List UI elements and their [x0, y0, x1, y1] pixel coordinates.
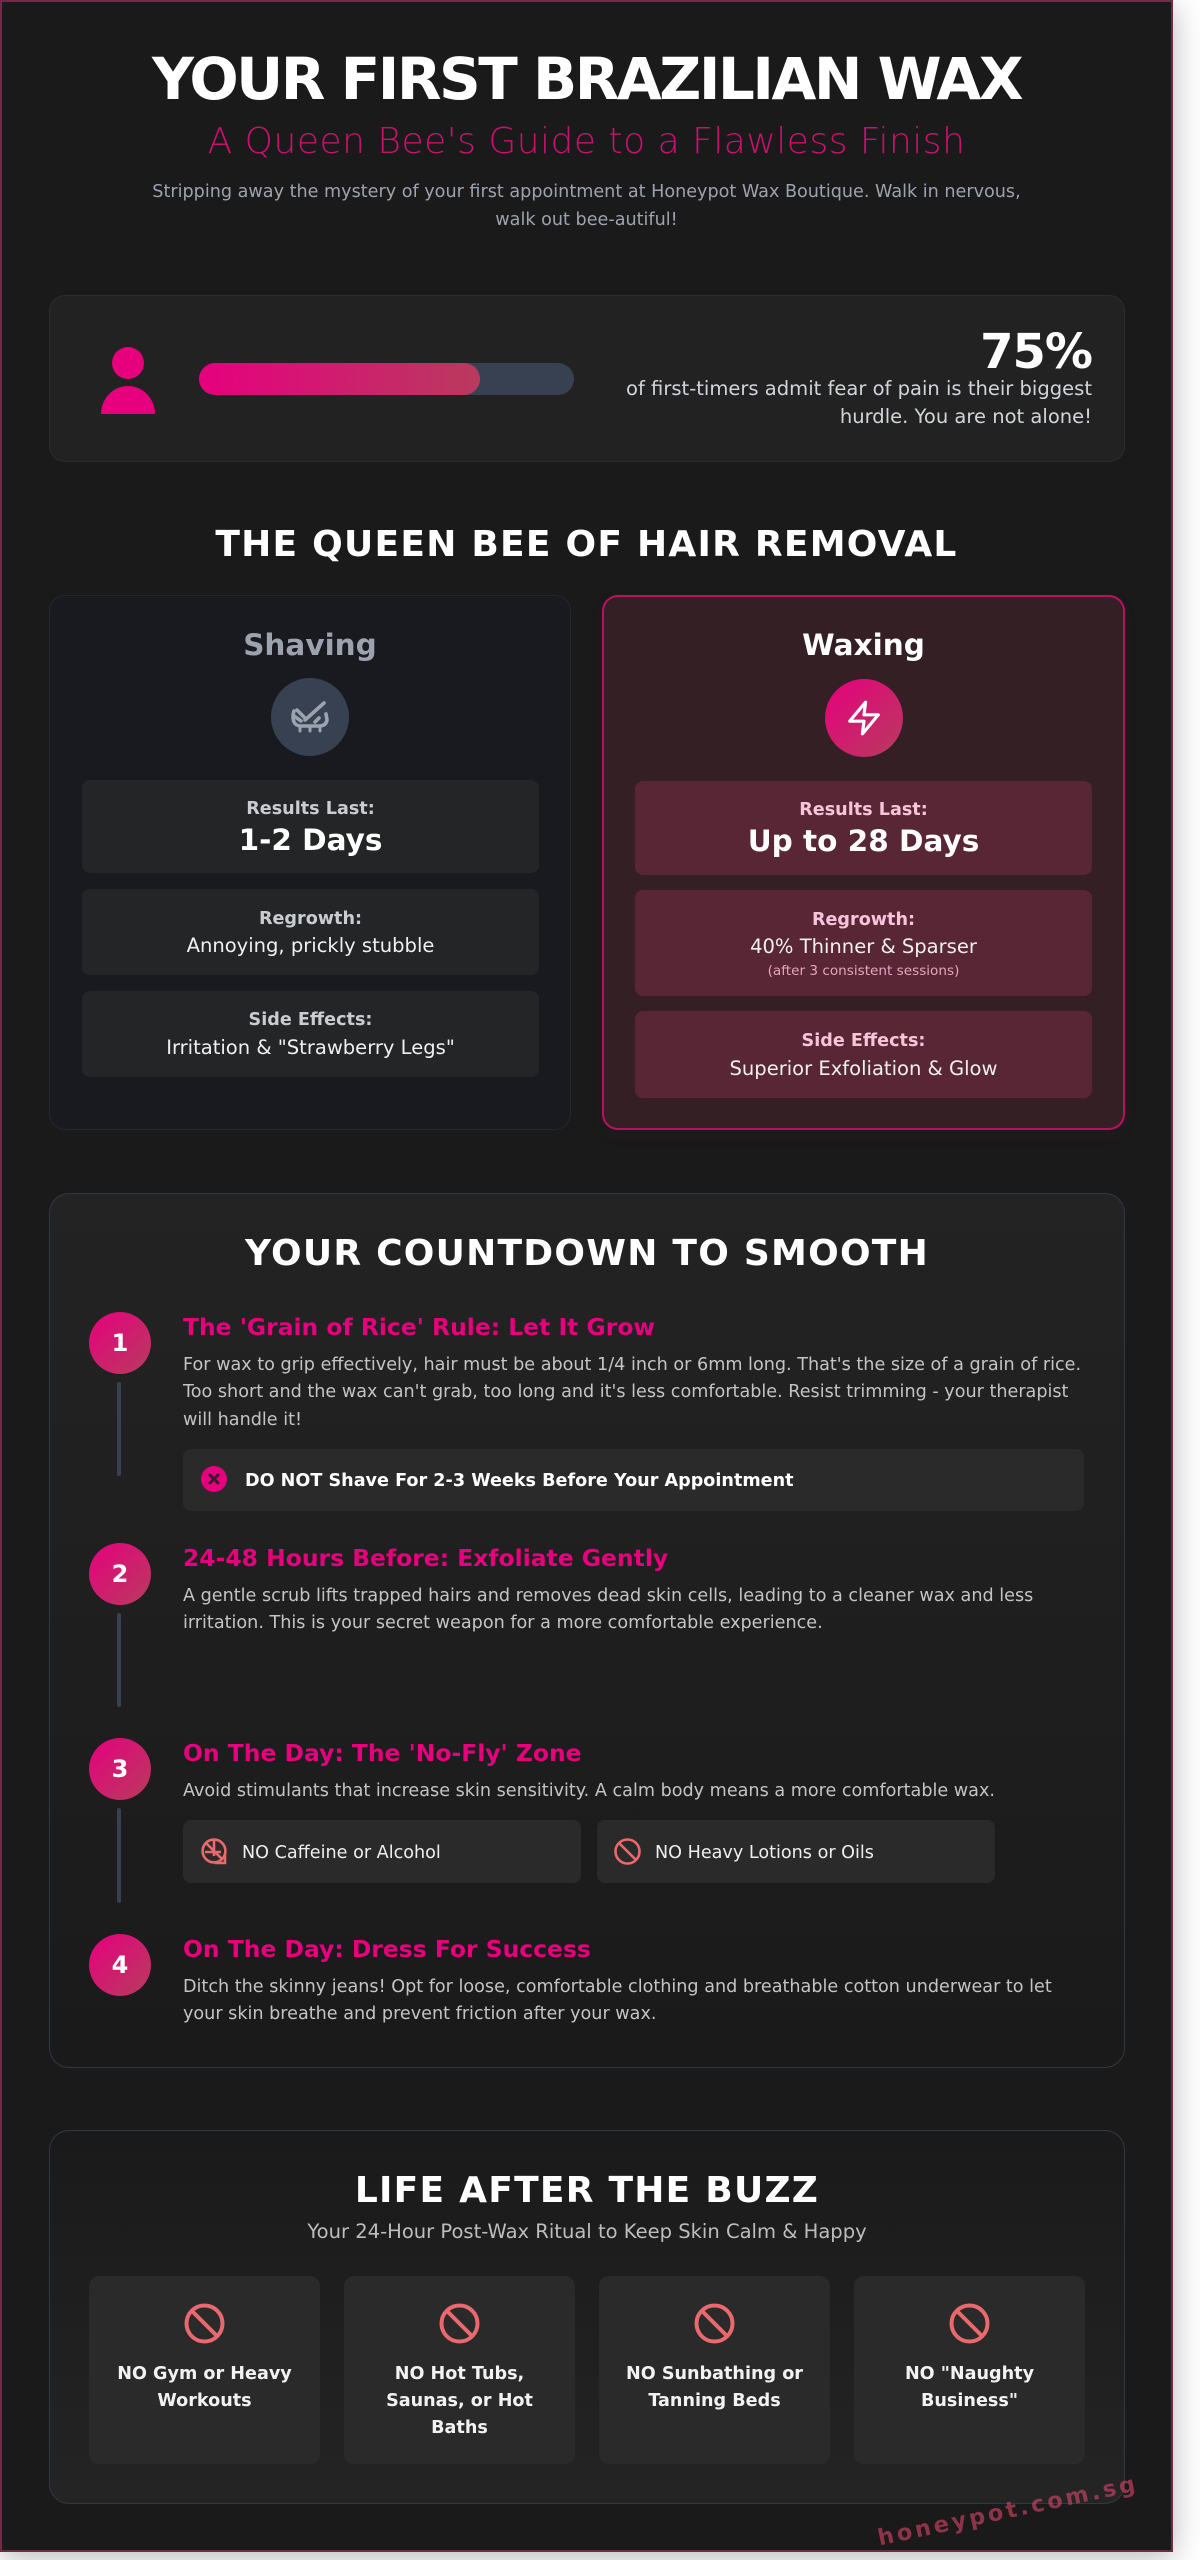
step number [89, 1312, 151, 1374]
icon: prohibited [184, 2304, 224, 2344]
row: side effects [635, 1011, 1092, 1098]
intro text: Stripping away the mystery of your first appointment at Honeypot Wax Boutique. Walk in nervous, [152, 182, 1021, 202]
row: regrowth [82, 889, 539, 975]
step text: will handle it! [183, 1410, 302, 1430]
icon: lightning bolt [825, 679, 903, 757]
step 2 [89, 1543, 1033, 1707]
text: Tanning Beds [648, 2391, 781, 2411]
text: NO Gym or Heavy [117, 2364, 292, 2384]
value: Superior Exfoliation & Glow [730, 1057, 997, 1080]
tile: no sunbathing [599, 2276, 830, 2464]
aftercare heading: LIFE AFTER THE BUZZ [355, 2170, 819, 2211]
value: 1-2 Days [239, 823, 382, 857]
panel: waxing [602, 595, 1125, 1130]
panel: shaving [49, 595, 571, 1130]
panel: 75% statistic [49, 295, 1125, 462]
warning box [183, 1449, 1084, 1511]
progress bar [199, 363, 574, 395]
stat caption: of first-timers admit fear of pain is their biggest [626, 377, 1092, 400]
row: regrowth [635, 890, 1092, 996]
value: Annoying, prickly stubble [187, 934, 434, 957]
step text [183, 1586, 1033, 1633]
icon: razor [271, 678, 349, 756]
step 1 [89, 1312, 1084, 1511]
text: NO "Naughty [905, 2364, 1034, 2384]
box: no lotions [597, 1820, 995, 1883]
label: Results Last: [246, 799, 375, 819]
step number [89, 1934, 151, 1996]
text [905, 2364, 1034, 2411]
step number: 1 [112, 1329, 128, 1357]
step text: For wax to grip effectively, hair must be about 1/4 inch or 6mm long. That's the size of a grain of rice. [183, 1355, 1081, 1375]
title: YOUR FIRST BRAZILIAN WAX [152, 45, 1021, 113]
text: Saunas, or Hot [386, 2391, 533, 2411]
step number [89, 1738, 151, 1800]
stat number: 75% [980, 324, 1092, 380]
value: 40% Thinner & Sparser [750, 935, 977, 958]
row: results last [82, 780, 539, 873]
heading: comparison: THE QUEEN BEE OF HAIR REMOVAL [215, 524, 958, 565]
text [386, 2364, 533, 2438]
text: NO Hot Tubs, [395, 2364, 524, 2384]
panel: aftercare [49, 2130, 1125, 2504]
panel: countdown [49, 1193, 1125, 2068]
step number: 2 [112, 1560, 128, 1588]
step title: 24-48 Hours Before: Exfoliate Gently [183, 1544, 668, 1572]
intro text: walk out bee-autiful! [495, 210, 678, 230]
tile: no gym [89, 2276, 320, 2464]
text [626, 2364, 803, 2411]
step title: The 'Grain of Rice' Rule: Let It Grow [183, 1313, 655, 1341]
intro text [152, 182, 1021, 230]
text: Workouts [157, 2391, 252, 2411]
icon: prohibited [440, 2304, 480, 2344]
stat caption: hurdle. You are not alone! [840, 405, 1092, 428]
footnote: (after 3 consistent sessions) [768, 963, 959, 979]
icon: prohibited [694, 2304, 734, 2344]
icon: person [101, 347, 155, 414]
step text [182, 1355, 1081, 1430]
step text [183, 1977, 1052, 2024]
aftercare subtitle: Your 24-Hour Post-Wax Ritual to Keep Skin Calm & Happy [307, 2220, 867, 2243]
label: Side Effects: [249, 1010, 372, 1030]
text: NO Heavy Lotions or Oils [655, 1843, 874, 1863]
step text: your skin breathe and prevent friction after your wax. [183, 2004, 656, 2024]
label: Results Last: [799, 800, 928, 820]
connector [117, 1382, 121, 1476]
countdown heading: YOUR COUNTDOWN TO SMOOTH [245, 1233, 929, 1274]
icon: prohibited [950, 2304, 990, 2344]
row: side effects [82, 991, 539, 1077]
box: no caffeine [183, 1820, 581, 1883]
row: results last [635, 781, 1092, 875]
connector [117, 1613, 121, 1707]
icon: cross [201, 1466, 227, 1492]
connector [117, 1808, 121, 1903]
text: NO Caffeine or Alcohol [242, 1843, 441, 1863]
text: Baths [431, 2418, 488, 2438]
waxing heading: Waxing [802, 628, 925, 662]
icon: no caffeine [201, 1838, 227, 1864]
warning text: DO NOT Shave For 2-3 Weeks Before Your Appointment [245, 1471, 794, 1491]
stat caption [626, 377, 1092, 428]
step 3 [89, 1738, 995, 1903]
step title: On The Day: The 'No-Fly' Zone [183, 1739, 582, 1767]
label: Side Effects: [802, 1031, 925, 1051]
text: Business" [921, 2391, 1018, 2411]
label: Regrowth: [259, 909, 362, 929]
icon: prohibited [614, 1838, 641, 1865]
step text: Avoid stimulants that increase skin sensitivity. A calm body means a more comfortable wax. [183, 1781, 995, 1801]
step 4 [89, 1934, 1052, 2024]
step number [89, 1543, 151, 1605]
tile: no hot tubs [344, 2276, 575, 2464]
text: NO Sunbathing or [626, 2364, 803, 2384]
value: Irritation & "Strawberry Legs" [166, 1036, 455, 1059]
step number: 4 [112, 1951, 128, 1979]
step number: 3 [112, 1755, 128, 1783]
step text: Too short and the wax can't grab, too long and it's less comfortable. Resist trimming - your therapist [183, 1382, 1068, 1402]
text [117, 2364, 292, 2411]
progress fill 75% [199, 363, 480, 395]
shaving heading: Shaving [243, 628, 377, 662]
step text: A gentle scrub lifts trapped hairs and removes dead skin cells, leading to a cleaner wax and less [183, 1586, 1033, 1606]
label: Regrowth: [812, 910, 915, 930]
watermark: honeypot.com.sg [875, 2471, 1141, 2551]
step text: Ditch the skinny jeans! Opt for loose, comfortable clothing and breathable cotton underwear to let [183, 1977, 1052, 1997]
subtitle: A Queen Bee's Guide to a Flawless Finish [208, 121, 965, 162]
tile: no naughty business [854, 2276, 1085, 2464]
step text: irritation. This is your secret weapon for a more comfortable experience. [183, 1613, 823, 1633]
value: Up to 28 Days [748, 824, 979, 858]
step title: On The Day: Dress For Success [183, 1935, 591, 1963]
